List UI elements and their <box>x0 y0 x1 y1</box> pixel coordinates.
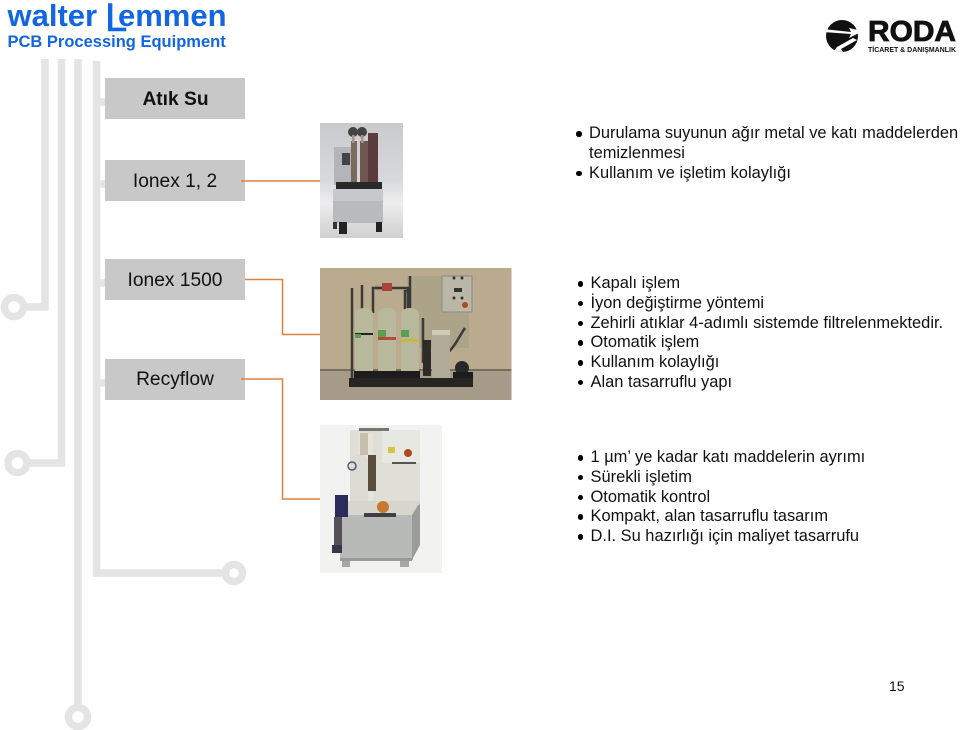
text block: Recyflow features: D.I. Su hazırlığı için maliyet tasarrufu <box>590 527 859 545</box>
text block: Ionex 1500 features: Alan tasarruflu yapı <box>590 373 732 391</box>
text block: Ionex 1500 features <box>578 274 943 391</box>
label box: Recyflow <box>105 358 245 400</box>
text block: Recyflow features <box>578 448 865 545</box>
label box: Recyflow: Recyflow <box>136 369 214 390</box>
text block: Ionex 1,2 features: temizlenmesi <box>589 144 685 162</box>
brand subtitle: PCB Processing Equipment <box>8 33 226 51</box>
brand logo: walter Lemmen <box>7 0 227 40</box>
photo: Ionex 1,2 unit <box>320 123 403 238</box>
RODA wordmark: RODA <box>868 16 956 48</box>
text block: Ionex 1,2 features <box>576 124 958 182</box>
logo: RODA <box>826 16 956 54</box>
heading box: Atık Su <box>105 78 245 119</box>
label box: Ionex 1, 2: Ionex 1, 2 <box>133 170 217 192</box>
text block: Ionex 1500 features: Otomatik işlem <box>590 333 699 351</box>
text block: Ionex 1500 features: Kapalı işlem <box>590 274 680 292</box>
text block: Ionex 1,2 features: Kullanım ve işletim kolaylığı <box>589 164 791 182</box>
photo: Ionex 1500 unit <box>320 268 512 400</box>
text block: Ionex 1500 features: Kullanım kolaylığı <box>590 353 719 371</box>
page number: 15 <box>889 678 905 694</box>
text block: Recyflow features: Sürekli işletim <box>590 468 692 486</box>
icon: RODA arrows <box>823 20 863 52</box>
photo: Recyflow unit <box>320 425 442 573</box>
text block: Ionex 1500 features: Zehirli atıklar 4-adımlı sistemde filtrelenmektedir. <box>590 314 943 332</box>
label box: Ionex 1500: Ionex 1500 <box>128 270 222 290</box>
label box: Ionex 1, 2 <box>105 160 245 201</box>
text block: Recyflow features: 1 µm’ ye kadar katı maddelerin ayrımı <box>590 448 865 466</box>
text block: Recyflow features: Kompakt, alan tasarruflu tasarım <box>590 507 828 525</box>
text block: Ionex 1500 features: İyon değiştirme yöntemi <box>590 294 764 312</box>
heading box: Atık Su: Atık Su <box>142 88 209 110</box>
label box: Ionex 1500 <box>105 259 245 300</box>
text block: Ionex 1,2 features: Durulama suyunun ağır metal ve katı maddelerden <box>589 124 958 142</box>
text block: Recyflow features: Otomatik kontrol <box>590 488 710 506</box>
